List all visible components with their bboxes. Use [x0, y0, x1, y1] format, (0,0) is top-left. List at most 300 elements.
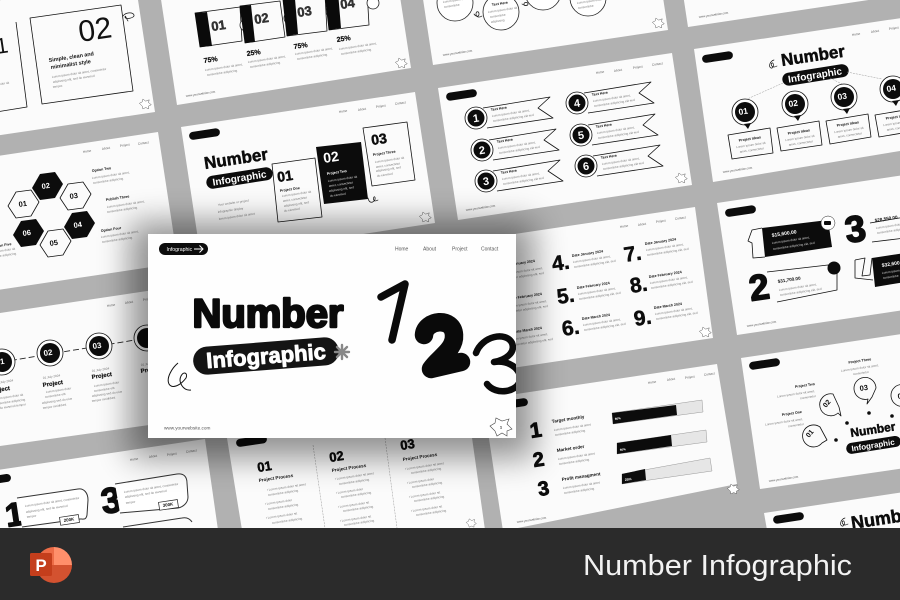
slide: progress bars: www.yourwebsite.com [517, 516, 547, 524]
slide: ribbons one to six: consectetur adipiscing elit sed [503, 176, 544, 186]
slide: timeline: tempor incididunt [43, 403, 67, 410]
slide: numbers four to nine: Date January 2024 [503, 259, 535, 268]
slide: timeline: consectetur elit [94, 386, 115, 393]
slide: number org diagram: www.yourwebsite.com [723, 166, 753, 174]
slide: puzzle percentages: consectetur adipiscing [207, 68, 238, 77]
slide: numbers four to nine: Lorem ipsum dolor sit amet, [509, 299, 547, 309]
slide: timeline: Home [107, 303, 116, 308]
slide: number org diagram: amet, consectetur [788, 139, 813, 147]
slide: numbers four to nine: Date January 2024 [572, 249, 603, 258]
slide: timeline: Project [42, 380, 63, 389]
slide: numbers four to nine: consectetur adipiscing elit, sed [574, 259, 616, 269]
slide: numbers four to nine: consectetur adipiscing elit, sed [579, 291, 621, 301]
slide: speech bubbles: Lorem ipsum dolor sit amet, [841, 363, 879, 373]
slide: puzzle percentages: 75% [203, 56, 219, 65]
slide: numbered callouts: Lorem ipsum dolor sit amet, consectetur [25, 496, 80, 508]
slide: circles top: consectetur [490, 13, 506, 19]
slide: project process columns: • Lorem ipsum dolor sit amet [405, 461, 444, 471]
slide: numbers four to nine: Lorem ipsum dolor sit amet, [510, 332, 548, 342]
slide: speech bubbles: www.yourwebsite.com [769, 475, 799, 483]
numeral two [424, 322, 461, 369]
slide: numbers four to nine: consectetur adipiscing elit, sed [584, 322, 626, 332]
slide: number infographic three cards: Number [203, 145, 269, 173]
slide: dollar figures [717, 168, 900, 335]
slide: timeline: Project [140, 366, 161, 375]
slide: bottom right partial [764, 492, 900, 528]
slide: speech bubbles: Lorem ipsum dolor sit amet, [765, 417, 803, 427]
slide: hexagon diagram: About [102, 146, 110, 151]
slide: numbers four to nine: Contact [675, 215, 686, 221]
slide: hexagon diagram: Home [83, 149, 92, 154]
hero tag pill [159, 243, 208, 255]
slide: number infographic three cards: do eiusmod [284, 207, 300, 213]
slide: 01 02 simple clean [0, 0, 155, 147]
slide: puzzle percentages [157, 0, 411, 105]
slide: hexagon diagram: Lorem ipsum dolor sit amet, [107, 199, 145, 209]
slide: 01 02 simple clean: 02 [76, 11, 114, 49]
slide: timeline: 01 July 2024 [141, 360, 159, 367]
slide: numbers four to nine: 8. [628, 273, 649, 298]
slide: progress bars: consectetur adipiscing [564, 486, 595, 495]
slide: 01 02 simple clean: minimalist style [50, 59, 91, 71]
slide: progress bars: Project [685, 375, 695, 380]
slide: project process columns: consectetur adipiscing [268, 488, 299, 497]
hero nav: Home [395, 246, 409, 252]
slide: puzzle percentages: www.yourwebsite.com [186, 90, 216, 98]
slide: progress bars: Contact [704, 371, 715, 377]
slide: number org diagram: Number [780, 42, 846, 70]
numeral one [381, 284, 405, 340]
slide: timeline: 01 July 2024 [92, 366, 110, 373]
slide: numbered callouts: Contact [186, 448, 197, 454]
slide: progress bars: Profit managment [561, 471, 601, 482]
slide: ribbons one to six: Lorem ipsum dolor sit amet, [597, 125, 635, 135]
slide: numbered callouts [0, 439, 218, 534]
slide: timeline: 02 [43, 348, 54, 358]
slide: number org diagram [694, 14, 900, 182]
slide: progress bars: 60% [620, 447, 626, 452]
slide: ribbons one to six: Text Here [497, 138, 513, 144]
slide: speech bubbles: Project Three [848, 357, 872, 365]
hero title number: Number [192, 292, 344, 336]
slide: hexagon diagram: Contact [138, 140, 149, 146]
slide: numbered callouts: 1 [3, 495, 26, 534]
slide: hexagon diagram: Publish Three [106, 195, 130, 202]
slide: numbers four to nine: 4. [550, 251, 571, 276]
slide: progress bars: Target monthly [551, 414, 585, 424]
slide: project process columns: Project Process [331, 463, 367, 473]
slide: number infographic three cards [181, 92, 435, 234]
slide: circles top [413, 0, 668, 65]
slide: number infographic three cards: Home [339, 109, 348, 114]
slide: numbers four to nine: Date February 2024 [509, 292, 542, 301]
slide: top right partial: www.yourwebsite.com [699, 11, 729, 19]
slide: dollar figures: $15,600.00 [771, 229, 797, 239]
slide: ribbons one to six: Home [596, 70, 605, 75]
slide: numbers four to nine: 7. [622, 242, 643, 267]
slide: number infographic three cards: 03 [370, 130, 388, 148]
slide: numbered callouts: 3 [98, 478, 124, 522]
slide: timeline [0, 290, 148, 446]
slide: circles top: consectetur [578, 4, 594, 10]
slide: hexagon diagram: consectetur adipiscing [102, 235, 133, 244]
slide: numbered callouts: adipiscing elit, sed do eiusmod [125, 489, 167, 499]
slide: progress bars: 80% [615, 416, 621, 421]
slide: number org diagram: Infographic [787, 66, 843, 86]
slide: number infographic three cards: amet, consectetur [329, 180, 353, 188]
slide: number org diagram: Lorem ipsum dolor sit [736, 141, 766, 149]
slide: timeline: Lorem ipsum dolor [94, 380, 119, 388]
slide: hexagon diagram: 05 [49, 238, 59, 248]
slide: number infographic three cards: Project [376, 104, 386, 109]
icon: asterisk [335, 345, 349, 359]
slide: dollar figures: consectetur [883, 274, 899, 280]
slide: number org diagram: 03 [837, 91, 848, 102]
slide: numbers four to nine: About [638, 222, 646, 227]
slide: ribbons one to six: consectetur adipiscing elit sed [493, 113, 534, 123]
slide: ribbons one to six: Text Here [592, 91, 608, 97]
slide: project process columns: • Lorem ipsum dolor sit amet [267, 482, 306, 492]
slide: project process columns: consectetur adipiscing [268, 502, 299, 511]
hero shadow [130, 222, 534, 458]
slide: timeline: Project [91, 372, 112, 381]
icon: powerpoint logo [30, 547, 72, 583]
slide: ribbons one to six: 2 [478, 145, 486, 157]
slide: numbered callouts: About [149, 454, 157, 459]
slide: hexagon diagram: consectetur adipiscing [93, 176, 124, 185]
slide: speech bubbles: consectetur [788, 422, 804, 428]
slide: number infographic three cards: do eiusmod [330, 192, 346, 198]
footer bar [0, 528, 900, 600]
slide: number org diagram: amet, consectetur [739, 146, 764, 154]
slide: ribbons one to six: 3 [482, 176, 490, 188]
slide: number org diagram: Lorem ipsum dolor sit [834, 126, 864, 134]
slide: numbers four to nine: 6. [560, 316, 581, 341]
slide: project process columns: 02 [328, 448, 345, 465]
slide: progress bars: 2 [531, 449, 546, 472]
hero page badge: 1 [500, 424, 503, 430]
slide: progress bars: Market order [556, 444, 585, 453]
slide: numbered callouts: tempor [27, 514, 37, 519]
slide: number infographic three cards: lorem ipsum dolor sit amet [219, 212, 255, 221]
slide: 01 02 simple clean: tempor. [53, 83, 63, 89]
slide: numbered callouts: adipiscing elit, sed do eiusmod [26, 504, 68, 514]
slide: numbers four to nine: Date March 2024 [513, 326, 542, 334]
slide: dollar figures: consectetur adipiscing elit, sed [773, 241, 815, 251]
slide: number infographic three cards: adipiscing elit, sed [284, 200, 309, 208]
slide: number infographic three cards: do eiusmod [377, 172, 393, 178]
slide: project process columns: • Lorem ipsum dolor sit [411, 504, 442, 513]
slide: 01 02 simple clean: adipiscing elit, sed do eiusmod [53, 74, 95, 84]
slide: progress bars: Lorem ipsum dolor sit amet [563, 480, 600, 490]
slide: ribbons one to six: Lorem ipsum dolor sit amet, [593, 93, 631, 103]
slide: numbers four to nine: Lorem ipsum dolor sit amet, [505, 266, 543, 276]
slide: speech bubbles: 03 [859, 383, 869, 393]
slide: ribbons one to six: Lorem ipsum dolor sit amet, [492, 108, 530, 118]
slide: number org diagram: Lorem ipsum dolor sit [785, 134, 815, 142]
slide: numbers four to nine: Lorem ipsum dolor sit amet, [578, 286, 616, 296]
slide: project process columns: consectetur adipiscing [416, 508, 447, 517]
slide: project process columns: Project Process [402, 452, 438, 462]
slide: progress bars: 3 [536, 478, 551, 501]
slide: puzzle percentages: Lorem ipsum dolor sit amet, [205, 62, 243, 72]
slide: number org diagram: About [871, 29, 879, 34]
slide: puzzle percentages: consectetur adipiscing [341, 47, 372, 56]
hero slide [148, 234, 520, 438]
slide: number infographic three cards: Infographic [212, 169, 268, 189]
slide: numbered callouts: 200K [63, 516, 75, 523]
slide: numbers four to nine: Lorem ipsum dolor sit amet, [583, 317, 621, 327]
slide: speech bubbles: consectetur [800, 394, 816, 400]
slide: 01 02 simple clean: Lorem ipsum dolor sit amet, consectetur [52, 67, 107, 79]
slide: number infographic three cards: Lorem ipsum dolor sit [375, 156, 405, 164]
slide: timeline: 03 [92, 341, 103, 351]
slide: ribbons one to six: www.yourwebsite.com [466, 204, 496, 212]
slide: hexagon diagram [0, 132, 178, 298]
slide: number org diagram: Project [889, 26, 899, 31]
slide: number infographic three cards: 02 [322, 148, 340, 166]
slide: number org diagram: Project Ideas [787, 128, 810, 136]
slide: project process columns: • Lorem ipsum dolor [336, 487, 363, 495]
slide: numbered callouts: Home [130, 457, 139, 462]
slide: puzzle percentages: 25% [336, 35, 352, 44]
slide: number infographic three cards: infographic display [218, 206, 244, 214]
slide: dollar figures: www.yourwebsite.com [747, 320, 777, 328]
slide: speech bubbles: Lorem ipsum dolor sit amet, [777, 389, 815, 399]
slide: numbers four to nine: Date March 2024 [582, 313, 610, 321]
slide: hexagon diagram: 04 [73, 220, 83, 230]
slide: progress bars: consectetur adipiscing [559, 457, 590, 466]
slide: ribbons one to six: 4 [573, 97, 582, 110]
slide: ribbons one to six [438, 53, 692, 220]
slide: numbers four to nine: consectetur adipiscing elit, sed [647, 247, 689, 257]
slide: hexagon diagram: Lorem ipsum dolor sit amet, [92, 170, 130, 180]
slide: dollar figures: Lorem ipsum dolor sit amet, [779, 282, 817, 292]
slide: number infographic three cards: Project Two [327, 169, 348, 176]
slide: dollar figures: $28,550.00 [874, 215, 898, 223]
slide: hexagon diagram: 01 [18, 199, 28, 209]
slide: ribbons one to six: Text Here [596, 123, 612, 129]
slide: number org diagram: 01 [738, 106, 749, 117]
slide: number infographic three cards: adipiscing elit, sed [329, 185, 354, 193]
hero infographic pill: Infographic [205, 339, 327, 373]
slide: hexagon diagram: Option Four [101, 226, 122, 233]
slide: progress bars: Lorem ipsum dolor sit amet [554, 422, 591, 432]
slide: 01 02 simple clean: Simple, clean and [48, 51, 94, 64]
slide: ribbons one to six: consectetur adipiscing elit sed [594, 98, 635, 108]
slide: project process columns: consectetur adipiscing [411, 466, 442, 475]
slide: project process columns: 03 [399, 436, 416, 453]
slide: hexagon diagram: 06 [22, 228, 32, 238]
slide: puzzle percentages: Lorem ipsum dolor sit amet, [339, 41, 377, 51]
slide: project process columns: consectetur adipiscing [343, 504, 374, 513]
slide: progress bars [483, 364, 739, 531]
slide: ribbons one to six: consectetur adipiscing elit sed [598, 130, 639, 140]
slide: ribbons one to six: About [614, 68, 622, 73]
slide: speech bubbles: Infographic [851, 438, 896, 453]
slide: numbers four to nine: Project [656, 219, 666, 224]
slide: puzzle percentages: 25% [246, 49, 262, 58]
icon: squiggle [168, 363, 191, 390]
slide: puzzle percentages: consectetur adipiscing [250, 60, 281, 69]
slide: numbers four to nine: consectetur adipiscing elit, sed [656, 311, 698, 321]
icon: powerpoint logo: P [35, 556, 47, 575]
slide: hexagon diagram: Option Two [92, 166, 112, 173]
slide: numbered callouts: Lorem ipsum dolor sit amet, consectetur [124, 482, 179, 494]
numeral three [476, 336, 520, 391]
slide: puzzle percentages: consectetur adipiscing [297, 52, 328, 61]
slide: ribbons one to six: Contact [652, 61, 663, 67]
slide: numbers four to nine: consectetur adipiscing elit, sed [506, 304, 548, 314]
slide: number org diagram: Project Ideas [738, 135, 761, 143]
slide: number infographic three cards: Project Three [373, 150, 396, 157]
slide: puzzle percentages: 03 [296, 3, 313, 20]
slide: number org diagram: 04 [886, 83, 897, 94]
slide: project process columns: consectetur adipiscing [341, 490, 372, 499]
slide: hexagon diagram: consectetur adipiscing [107, 205, 138, 214]
slide: numbers four to nine: Date February 2024 [577, 281, 610, 290]
slide: progress bars: About [667, 377, 675, 382]
slide: numbers four to nine: Date February 2024 [649, 270, 682, 279]
slide: timeline: Project [143, 297, 153, 302]
slide: hexagon diagram: 02 [41, 181, 51, 191]
slide: puzzle percentages: 01 [210, 17, 227, 34]
slide: ribbons one to six: Project [633, 65, 643, 70]
slide: numbers four to nine: 9. [632, 306, 653, 331]
slide: timeline: About [125, 300, 133, 305]
slide: progress bars: Lorem ipsum dolor sit amet [558, 451, 595, 461]
slide: number org diagram: 02 [788, 98, 799, 109]
slide: number infographic three cards: Your website or project [218, 198, 249, 207]
slide: number infographic three cards: About [358, 107, 366, 112]
slide: speech bubbles: Number [849, 419, 897, 440]
slide: number infographic three cards: Lorem ipsum dolor sit [282, 190, 312, 198]
slide: project process columns: • Lorem ipsum dolor sit [266, 511, 297, 520]
slide: numbers four to nine: Date January 2024 [645, 237, 676, 246]
slide: circles top: consectetur [444, 3, 460, 9]
hero nav [395, 246, 499, 252]
slide: project process columns: consectetur adipiscing [339, 477, 370, 486]
slide: ribbons one to six: Text Here [501, 169, 517, 175]
slide: dollar figures: consectetur adipiscing elit, sed [780, 287, 822, 297]
slide: circles top: Text Here [492, 1, 508, 7]
slide: speech bubbles: 01 [805, 429, 816, 439]
hero page badge [490, 418, 512, 436]
slide: ribbons one to six: Lorem ipsum dolor sit amet, [502, 171, 540, 181]
slide: project process columns: • Lorem ipsum dolor sit [340, 514, 371, 523]
slide: ribbons one to six: 1 [472, 113, 480, 125]
slide: timeline: Lorem ipsum dolor [46, 386, 71, 394]
slide: number infographic three cards: adipiscing elit, sed [376, 165, 401, 173]
slide: dollar figures: 3 [842, 207, 869, 251]
slide: hexagon diagram: 03 [69, 191, 79, 201]
hero nav: Project [452, 246, 468, 252]
slide: dollar figures: Lorem ipsum dolor sit amet, [772, 235, 810, 245]
slide: numbers four to nine: Lorem ipsum dolor sit amet, [646, 242, 684, 252]
slide: number infographic three cards: 01 [276, 167, 294, 185]
hero website url: www.yourwebsite.com [164, 426, 210, 430]
slide: numbers four to nine: Lorem ipsum dolor sit amet, [655, 306, 693, 316]
slide: puzzle percentages: Lorem ipsum dolor sit amet, [248, 54, 286, 64]
slide: puzzle percentages: 02 [253, 10, 270, 27]
slide: project process columns [227, 438, 485, 528]
slide: circles top: Lorem ipsum dolor sit [488, 6, 518, 14]
slide: numbers four to nine: consectetur adipiscing elit, sed [651, 280, 693, 290]
slide: speech bubbles [741, 323, 900, 489]
slide: number org diagram: amet, consectetur [837, 131, 862, 139]
slide: ribbons one to six: 5 [577, 130, 585, 142]
slide: project process columns: consectetur adipiscing [272, 516, 303, 525]
hero nav: About [423, 246, 437, 252]
slide: numbered callouts: tempor [126, 500, 136, 505]
slide: timeline: adipiscing sed do eius [42, 396, 73, 405]
slide: progress bars: 1 [528, 418, 544, 443]
slide: number org diagram: Home [852, 32, 861, 37]
hero nav: Contact [481, 246, 499, 252]
slide: project process columns: consectetur adipiscing [344, 518, 375, 527]
slide: numbers four to nine: Lorem ipsum dolor sit amet, [650, 275, 688, 285]
slide: speech bubbles: consectetur [853, 370, 869, 376]
slide: numbers four to nine: consectetur adipiscing elit, sed [511, 337, 553, 347]
slide: project process columns: consectetur adipiscing [412, 480, 443, 489]
slide: top right partial [684, 0, 868, 27]
slide: timeline: adipiscing sed do eius [92, 389, 123, 398]
slide: timeline: tempor incididunt [92, 396, 116, 403]
slide: project process columns: Project Process [258, 473, 294, 483]
slide: numbers four to nine: Lorem ipsum dolor sit amet, [573, 254, 611, 264]
slide: puzzle percentages: 75% [293, 42, 309, 51]
slide: ribbons one to six: consectetur adipiscing elit sed [603, 161, 644, 171]
slide: numbered callouts: 300K [162, 501, 174, 508]
slide: project process columns: • Lorem ipsum dolor sit amet [335, 471, 374, 481]
slide: circles top: adipiscing [491, 18, 505, 24]
slide: number infographic three cards: Contact [395, 100, 406, 106]
slide: ribbons one to six: Text Here [491, 106, 507, 112]
slide: numbers four to nine: Home [620, 224, 629, 229]
slide: number org diagram: Project Ideas [836, 120, 859, 128]
slide: number infographic three cards: Project One [280, 186, 300, 193]
slide: numbers four to nine: Date March 2024 [654, 302, 682, 310]
slide: number infographic three cards: amet, consectetur [283, 195, 307, 203]
slide: puzzle percentages: Lorem ipsum dolor sit amet, [295, 46, 333, 56]
slide: project process columns: • Lorem ipsum dolor [407, 477, 434, 485]
hero tag pill: Infographic [166, 247, 193, 253]
footer title: Number Infographic [583, 550, 852, 582]
slide: number infographic three cards: Lorem ipsum dolor sit [328, 175, 358, 183]
slide: hexagon diagram: Lorem ipsum dolor sit amet, [101, 229, 139, 239]
slide: numbers four to nine: consectetur adipiscing elit, sed [502, 271, 544, 281]
slide: timeline: consectetur elit [45, 392, 66, 399]
slide: dollar figures: 2 [746, 265, 772, 309]
slide: number infographic three cards: amet, consectetur [376, 161, 400, 169]
slide: project process columns: • Lorem ipsum dolor sit [338, 500, 369, 509]
slide: ribbons one to six: consectetur adipiscing elit sed [499, 145, 540, 155]
slide: hexagon diagram: Project [120, 143, 130, 148]
slide: numbers four to nine: 5. [555, 284, 576, 309]
slide: ribbons one to six: 6 [582, 161, 590, 173]
slide: project process columns: • Lorem ipsum dolor sit [409, 490, 440, 499]
slide: numbers four to nine [515, 207, 713, 368]
slide: dollar figures: $31,700.00 [777, 276, 801, 284]
slide: speech bubbles: Project One [782, 410, 802, 417]
slide: progress bars: 25% [625, 477, 632, 482]
slide: ribbons one to six: Lorem ipsum dolor sit amet, [602, 156, 640, 166]
slide: timeline: 01 July 2024 [43, 373, 61, 380]
slide: progress bars: Home [648, 380, 657, 385]
slide: numbered callouts: Project [167, 452, 177, 457]
slide: circles top: www.yourwebsite.com [443, 49, 473, 57]
slide: ribbons one to six: Lorem ipsum dolor sit amet, [498, 140, 536, 150]
